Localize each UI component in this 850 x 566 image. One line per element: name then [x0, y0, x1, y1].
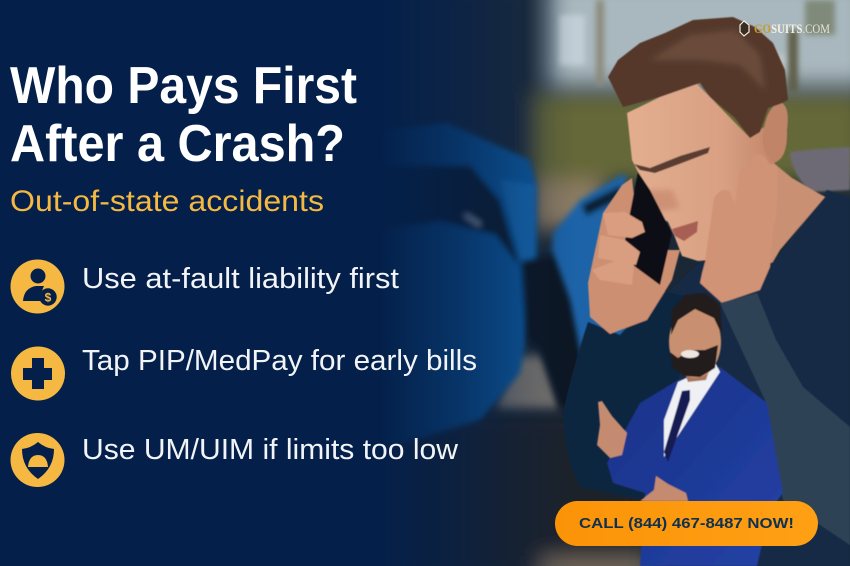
mouth [672, 221, 698, 241]
logo [740, 21, 830, 36]
hand on cheek [700, 154, 778, 303]
title: Who Pays First [10, 57, 357, 115]
head [669, 306, 721, 378]
item 2: PIP/MedPay [11, 345, 477, 400]
dark gap between the cars [522, 250, 590, 410]
suit [607, 367, 783, 566]
blue car, right [552, 173, 640, 400]
call to action button [555, 501, 818, 546]
text: Tap PIP/MedPay for early bills [82, 345, 477, 377]
sweater body [640, 190, 850, 566]
background photo: blurred crash scene [360, 0, 850, 566]
navy fade panel [0, 0, 575, 566]
tree trunks and sky patches [560, 0, 835, 92]
tan roadside [535, 180, 605, 230]
olive treeline [535, 92, 850, 182]
text: Use UM/UIM if limits too low [82, 434, 459, 466]
text: Use at-fault liability first [82, 263, 399, 295]
attorney hair [671, 293, 722, 335]
item 1: at-fault liability [10, 260, 399, 314]
ear [762, 103, 788, 163]
brow [634, 147, 710, 173]
attorney in blue suit [597, 293, 783, 566]
sweater right sleeve [720, 293, 850, 545]
crashed blue car, left [380, 123, 537, 450]
phone [622, 172, 672, 285]
logo wordmark: GOSUITS.COM [754, 22, 830, 36]
road between cars [496, 356, 560, 408]
face [627, 82, 787, 261]
tie [664, 390, 690, 462]
shirt [664, 364, 720, 457]
title: After a Crash? [10, 115, 345, 173]
man on the phone [563, 17, 850, 566]
dark tree band [360, 0, 535, 240]
icon: shield [10, 433, 64, 487]
grey car roof [790, 147, 850, 192]
icon: person with dollar [10, 260, 64, 314]
hair highlight [650, 30, 765, 90]
lower hand [640, 476, 688, 501]
sweater left arm [563, 290, 700, 500]
pointing hand [597, 401, 627, 458]
logo shield icon [740, 21, 749, 36]
icon: medical cross [11, 346, 65, 400]
bottom road [400, 412, 640, 566]
call to action button: CALL (844) 467-8487 NOW! [579, 516, 794, 532]
smile [681, 350, 699, 358]
subtitle: Out-of-state accidents [10, 185, 324, 218]
fingers on phone [592, 212, 645, 285]
beard [670, 345, 718, 377]
neck [745, 160, 825, 275]
icon: person with dollar: $ [45, 290, 52, 304]
pale sky [548, 0, 850, 85]
hand holding phone [588, 178, 680, 334]
item 3: UM/UIM [10, 433, 459, 487]
neck [682, 362, 712, 382]
hair [608, 17, 788, 138]
nose shadow [645, 190, 680, 212]
